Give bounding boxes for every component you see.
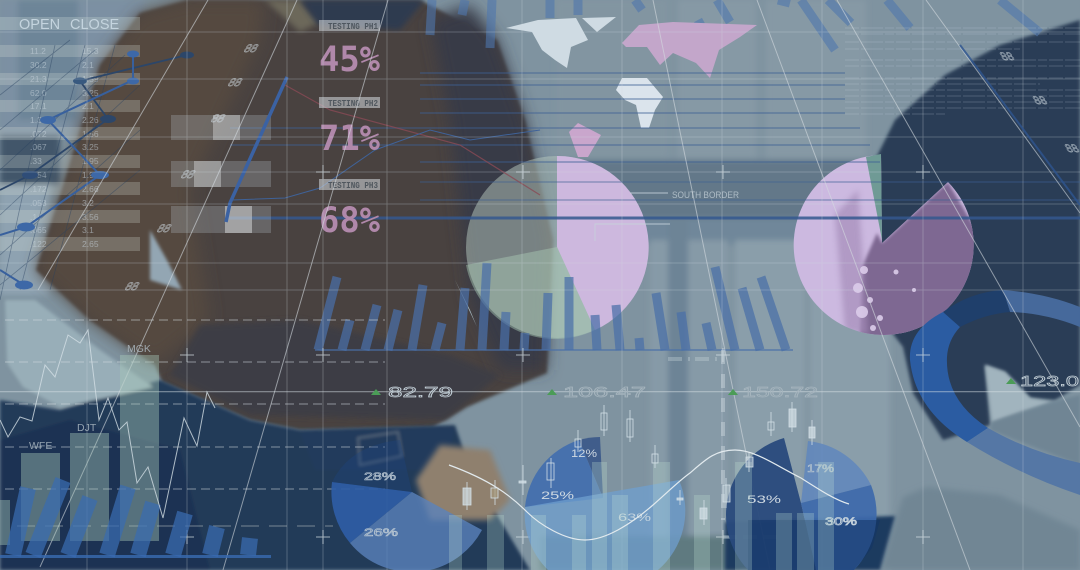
table values: 62.0 [30,88,47,98]
table stripes [0,45,140,251]
pie label 53 percent: 53% [747,494,781,506]
table values: .14 [30,212,42,222]
table values: .172 [30,184,47,194]
map: Eurasia [622,22,757,78]
blue ring chart [910,290,1080,495]
blue diagonal accent [960,45,1080,205]
table values: 3.25 [82,88,99,98]
table values: 30.2 [30,60,47,70]
ring segment: top right [1003,290,1080,327]
table values: 2.1 [82,101,94,111]
bar labels: DJT [77,422,97,434]
map: Greenland [582,17,616,32]
ticker: 82.79: 82.79 [388,384,453,401]
isometric small tags: 88 [178,168,198,181]
world map [506,17,757,157]
isometric small tags: 88 [997,50,1017,63]
map: Africa [616,78,663,128]
table perspective grid [0,40,140,300]
nodes [15,50,194,290]
pie label 28 percent: 28% [364,471,396,483]
candlestick chart [463,402,815,525]
table values: 21.3 [30,74,47,84]
dark series [0,55,187,190]
isometric small tags: 88 [154,222,174,235]
bar labels: MGK [127,343,151,355]
centre dashed ticker divider [721,350,725,520]
table values: 2.65 [82,239,99,249]
table values: 1.56 [82,129,99,139]
person: woman with curly hair and pale top [870,20,1080,570]
table values: .33 [30,156,42,166]
middle bar chart [318,263,786,350]
south border label [595,190,739,241]
table values: 11.2 [30,46,46,56]
ticker: 82.79 [371,384,453,401]
table values: .053 [30,198,47,208]
zigzag line [0,330,215,518]
ticker: 123.0 [1006,373,1079,390]
map: South America [569,123,601,157]
table header band [0,17,140,30]
label: testing ph2: TESTING PH2 [328,99,378,109]
sine curve [449,450,849,540]
translucent vertical bar chart [449,462,834,570]
table values: 3.56 [82,212,99,222]
pie label 25 percent: 25% [541,490,574,502]
small dashes [668,359,783,537]
testing stats [319,20,380,241]
ring segment: left [910,312,988,442]
pie chart: bottom left [331,440,482,570]
value: 71 percent: 71% [319,119,380,159]
table values: 1.95 [82,156,99,166]
laptop [725,516,895,570]
left node line chart [0,50,194,290]
cross markers [180,165,930,544]
table values: 3.2 [82,198,94,208]
value: 68 percent: 68% [319,201,380,241]
ticker: 150.72: 150.72 [742,384,818,401]
pie label 63 percent: 63% [618,512,651,524]
person: man in brown shirt [36,0,553,430]
ticker values [371,373,1079,401]
pie shadow over laptop [748,520,880,570]
pie chart: right [794,154,985,340]
left data table [0,17,140,300]
pie label 30 percent: 30% [825,516,857,528]
table values: 2.1 [82,60,94,70]
blue horizontal rules [230,73,1080,200]
pie label 17 percent: 17% [807,463,834,475]
table values: 1.36 [30,115,47,125]
label: testing ph3 [319,179,380,191]
table values [30,46,99,249]
south border label: SOUTH BORDER [672,190,739,201]
pie chart: bottom right [726,438,880,570]
table values: 3.1 [82,225,94,235]
table values: 15.3 [82,46,99,56]
neck [985,365,1052,422]
garment inside ring [990,395,1080,465]
label: testing ph1 [319,20,380,32]
left data table: CLOSE [70,17,119,33]
dashed guide lines [5,320,385,489]
bar labels [29,343,151,452]
pie label 26 percent: 26% [364,527,398,539]
bottom-left blue bars [0,480,271,558]
middle bar baseline [315,349,793,351]
table values: 17.1 [30,101,47,111]
translucent progress blocks [171,115,271,233]
table values: 1.59 [82,74,99,84]
dark trousers and foreground person [0,300,530,570]
pie chart: bottom middle [525,437,685,570]
label: testing ph1: TESTING PH1 [328,22,378,32]
ring segment: upper left dark [943,290,1010,327]
isometric small tags: 88 [208,112,228,125]
label: testing ph3: TESTING PH3 [328,181,378,191]
translucent text block [845,28,1080,114]
ticker: 150.72 [728,384,818,401]
trend lines behind percentages [226,77,540,222]
isometric small tags: 88 [241,42,261,55]
hair [870,20,1080,440]
isometric small tags [122,42,1080,293]
table values: .122 [30,239,47,249]
pie chart: centre [466,156,649,339]
table values: 2.26 [82,115,99,125]
garment lower [880,487,1080,570]
pie label 12 percent: 12% [571,448,597,460]
table values: .067 [30,142,47,152]
table values: .072 [30,129,47,139]
table values: .054 [30,170,47,180]
label: testing ph2 [319,97,380,109]
isometric small tags: 88 [1030,94,1050,107]
blue series [0,54,133,285]
isometric small tags: 88 [122,280,142,293]
ticker: 123.0: 123.0 [1020,373,1079,390]
bar labels: WFE [29,440,52,452]
table values: .065 [30,225,47,235]
horizontal ticker line [0,391,1080,392]
ticker: 106.47: 106.47 [563,384,646,401]
table header labels: OPEN [19,17,60,33]
hand [416,445,510,520]
main blue rule [226,216,1080,220]
bottom-left grey green bars [0,355,159,545]
long dash guide line [17,525,333,527]
value: 45 percent: 45% [319,40,380,80]
map: North America [506,18,588,68]
table values: 2.66 [82,184,99,194]
table values: 3.25 [82,142,99,152]
isometric small tags: 88 [225,76,245,89]
ticker: 106.47 [547,384,646,401]
top slanted blue bars [430,0,1040,50]
ring segment: lower right [967,428,1080,495]
table values: 1.98 [82,170,99,180]
